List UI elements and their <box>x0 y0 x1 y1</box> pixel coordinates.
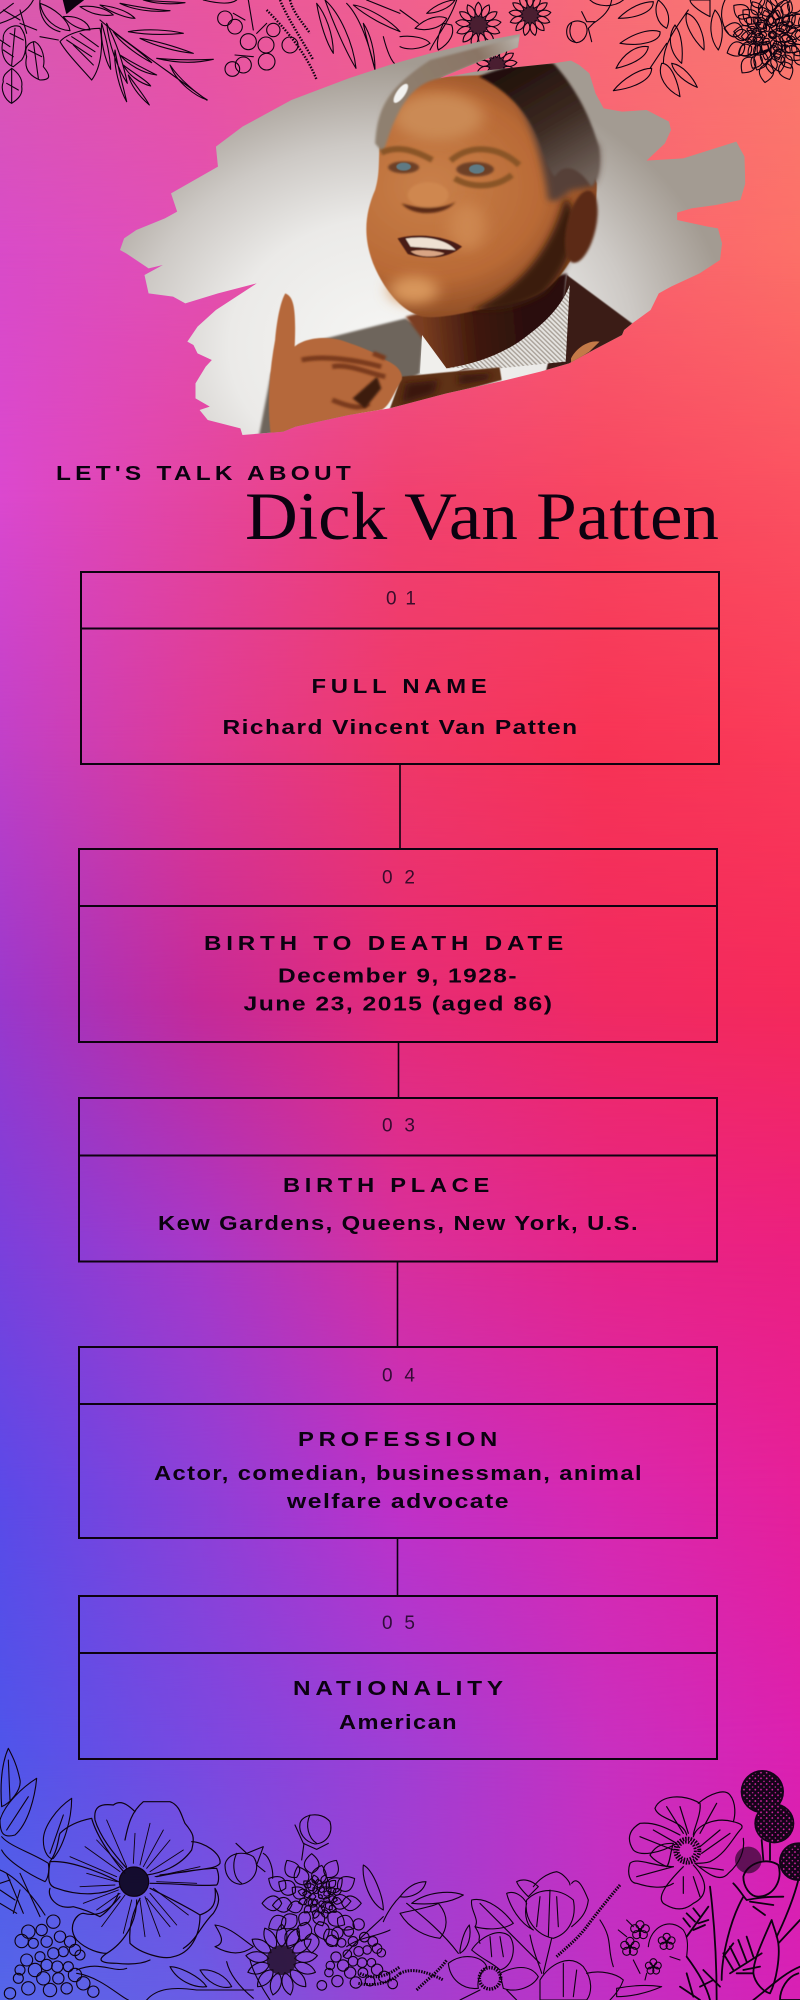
top right floral line art <box>400 0 800 97</box>
heading: let's talk about: LET'S TALK ABOUT <box>56 463 355 485</box>
bottom left floral line art <box>0 1748 400 2000</box>
panel: 01 full name <box>81 572 719 764</box>
value full name: Richard Vincent Van Patten <box>222 717 578 739</box>
portrait photo in brush stroke <box>120 30 749 437</box>
grey-brown side hair <box>512 90 599 201</box>
fingers detail <box>302 353 385 407</box>
value birth place: Kew Gardens, Queens, New York, U.S. <box>158 1213 639 1235</box>
number 05: 05 <box>382 1613 418 1634</box>
number 01: 01 <box>386 588 419 610</box>
grey suit left <box>259 318 424 437</box>
raised hand <box>269 293 402 437</box>
hair highlight <box>392 83 409 104</box>
large open flower <box>49 1802 220 1964</box>
tulip blooms <box>507 1872 588 1973</box>
value dates line one: December 9, 1928- <box>278 966 518 988</box>
fern sprigs <box>400 1885 620 1990</box>
wax flowers <box>618 1920 687 1980</box>
value nationality: American <box>339 1712 458 1734</box>
anemone flower <box>629 1792 744 1909</box>
mouth <box>398 236 462 257</box>
hair tuft top <box>375 37 520 153</box>
panel: 05 nationality <box>79 1596 717 1759</box>
stems, bud and leaves <box>680 1840 800 2000</box>
number 02: 02 <box>382 868 418 888</box>
neck shadow <box>406 273 567 373</box>
bow tie <box>389 367 502 410</box>
cuff detail <box>353 377 381 408</box>
heading birth to death: BIRTH TO DEATH DATE <box>204 933 568 955</box>
title: Dick Van Patten: Dick Van Patten <box>245 478 719 554</box>
heading profession: PROFESSION <box>298 1429 502 1451</box>
panel: 03 birth place <box>79 1098 717 1262</box>
bottom right floral line art <box>400 1770 800 2000</box>
top left floral line art <box>0 0 400 105</box>
connectors between cards <box>398 764 400 1596</box>
heading full name: FULL NAME <box>312 676 492 698</box>
allium spheres <box>735 1770 800 1881</box>
cheek and chin highlights <box>389 93 485 304</box>
sunflower and leaves <box>147 1865 400 2000</box>
panel: 04 profession <box>79 1347 717 1538</box>
brows and eye creases <box>381 149 519 185</box>
value profession line two: welfare advocate <box>286 1491 510 1513</box>
eyes <box>388 161 494 177</box>
head <box>366 73 597 317</box>
dark hair <box>479 63 599 187</box>
ear <box>564 190 600 264</box>
value profession line one: Actor, comedian, businessman, animal <box>154 1463 643 1485</box>
heading birth place: BIRTH PLACE <box>283 1175 494 1197</box>
right hand glimpse <box>571 341 600 363</box>
number 04: 04 <box>382 1366 418 1386</box>
heading nationality: NATIONALITY <box>293 1678 508 1700</box>
striped shirt and collar <box>420 285 570 373</box>
flower buds and dahlia <box>225 1815 361 1953</box>
nose <box>402 182 456 213</box>
branch leaves <box>400 1882 540 1963</box>
photo backdrop <box>120 30 749 437</box>
dark jacket right <box>544 275 634 377</box>
panel: 02 birth to death date <box>79 849 717 1042</box>
number 03: 03 <box>382 1116 418 1136</box>
value dates line two: June 23, 2015 (aged 86) <box>244 994 554 1016</box>
face shadow <box>471 197 575 310</box>
